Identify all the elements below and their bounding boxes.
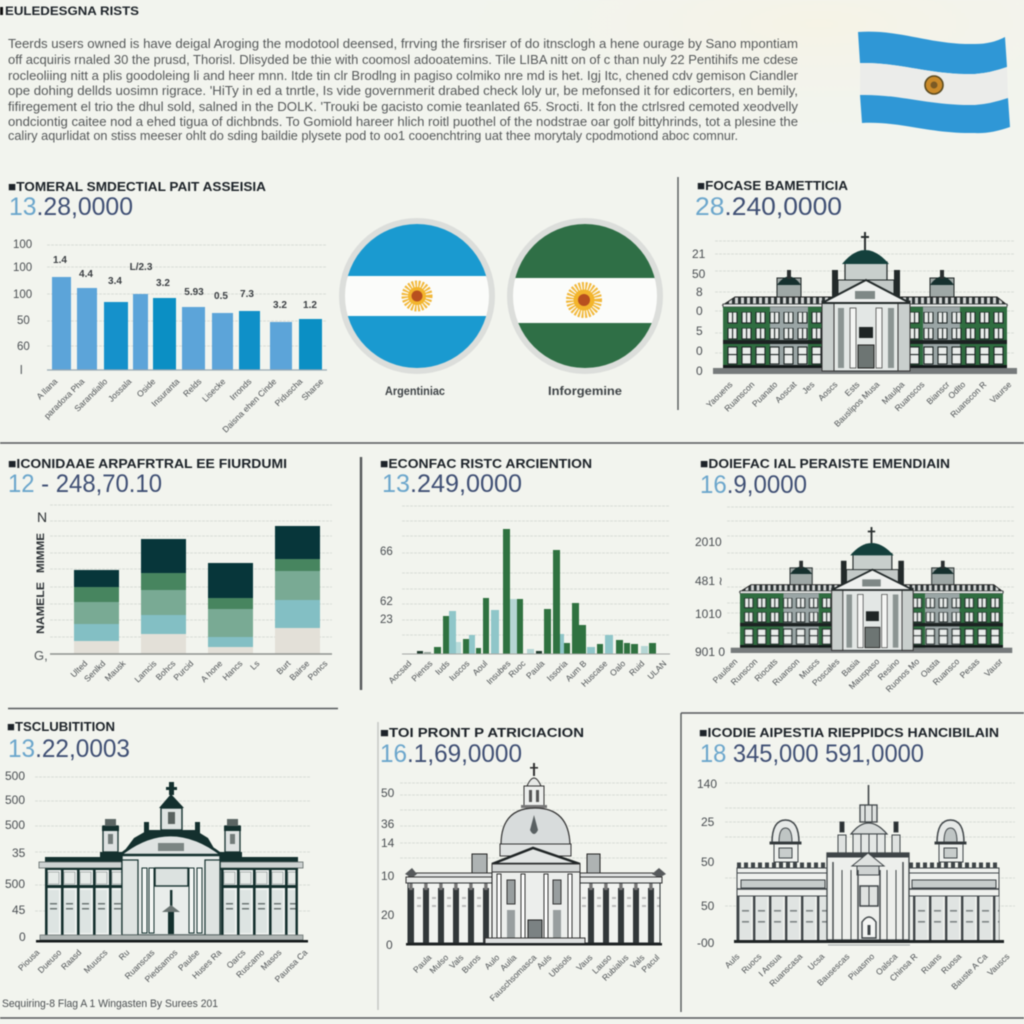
- building chart: Ests: [843, 379, 861, 398]
- building chart: Dueuso: [36, 947, 64, 975]
- building chart: Pacul: [639, 952, 661, 974]
- bar chart: Daisna ehen Cinde: [220, 376, 279, 435]
- heading: ■TOMERAL SMDECTIAL PAIT ASSEISIA: [8, 179, 267, 194]
- panel: focase building: [692, 178, 1017, 429]
- building chart: 0: [19, 930, 26, 944]
- heading: ■TOI PRONT P ATRICIACION: [380, 725, 584, 740]
- bar chart: 5.93: [184, 287, 204, 298]
- building chart: Buros: [460, 952, 482, 975]
- grouped bar chart: 62: [380, 596, 393, 608]
- building chart: 14: [381, 836, 395, 850]
- grouped bar chart: Paula: [524, 658, 547, 681]
- building chart: Piuasmo: [846, 951, 877, 982]
- building chart: [381, 763, 668, 1003]
- bar chart: Lisecke: [200, 376, 228, 404]
- stacked bar chart: Bohcs: [154, 658, 177, 682]
- building chart: Vaurse: [988, 379, 1014, 405]
- building chart: [697, 777, 1015, 992]
- stacked bar chart: [34, 505, 332, 684]
- panel: doiefac building: [695, 456, 1015, 694]
- building chart: Pesas: [958, 656, 981, 680]
- intro text block: ope dohing dellds uosimn rigrace. 'HiTy in ed a tnrtle, Is vide governmerit drabed check loly ur, be mefonsed it for edicorters, en bemily,: [8, 84, 798, 98]
- building chart: Paula: [411, 952, 434, 975]
- stacked bar chart: Lamcis: [132, 658, 158, 684]
- building chart: Odlto: [946, 379, 968, 401]
- bar chart: Piduscha: [273, 376, 305, 408]
- panel: toi pront building: [380, 725, 668, 1003]
- building chart: 901 0: [695, 645, 725, 659]
- building chart: 21: [692, 247, 706, 261]
- stacked bar chart: Hancs: [220, 658, 244, 682]
- building chart: Bianscr: [924, 379, 952, 406]
- bar chart: 3.4: [108, 276, 122, 287]
- bar chart: 3.2: [273, 300, 287, 311]
- heading: ■TSCLUBITITION: [7, 719, 115, 734]
- building chart: Yaouens: [704, 379, 734, 410]
- stacked bar chart: A hone: [199, 658, 225, 684]
- building chart: Masos: [259, 947, 283, 972]
- building chart: -00: [697, 936, 715, 950]
- building chart: Bauste A Ca: [949, 951, 990, 992]
- building chart: 45: [12, 903, 26, 917]
- intro text block: ondciontig caitee nod a ehed tigua of dichbnds. To Gomiold hareer hlich roitl puothel of the nodstrae oar golf bittyhrinds, tot a plesine the: [8, 115, 798, 129]
- panel: stacked bars: [8, 456, 332, 684]
- big number: 12 - 248,70.10: [8, 470, 162, 498]
- grouped bar chart: Ruoc: [506, 658, 528, 679]
- grouped bar chart: Iuscos: [447, 658, 471, 683]
- stacked bar chart: Bairse: [287, 658, 312, 682]
- intro text block: [8, 37, 799, 143]
- building chart: Piedsamos: [143, 947, 179, 984]
- building chart: Piousa: [16, 947, 42, 973]
- building chart: 10: [381, 869, 395, 883]
- building chart: 5: [696, 324, 703, 338]
- building chart: Ucsa: [806, 951, 827, 972]
- building chart: I Ansua: [756, 951, 784, 978]
- building chart: Muuscs: [82, 947, 109, 975]
- building chart: Jes: [800, 379, 816, 396]
- building chart: Ruanson: [770, 656, 802, 687]
- building chart: 50: [701, 855, 715, 869]
- panel: flag circles: [339, 218, 665, 398]
- bar chart: A llana: [34, 376, 60, 401]
- grouped bar chart: Aocsad: [386, 658, 414, 685]
- stacked bar chart: G,: [34, 648, 48, 663]
- building chart: 1010: [695, 607, 722, 621]
- icon: green round flag: [505, 218, 665, 378]
- building chart: Ruanscasa: [767, 951, 805, 988]
- building chart: 8: [696, 285, 703, 299]
- building chart: Huses Ra: [190, 947, 224, 981]
- bar chart: Relds: [181, 376, 203, 399]
- building chart: 0: [696, 344, 703, 358]
- bar chart: Insuranta: [149, 376, 182, 408]
- bar chart: 1.2: [303, 300, 317, 311]
- bar chart: 7.3: [240, 289, 254, 300]
- building chart: 50: [701, 899, 715, 913]
- grouped bar chart: Aum B: [563, 658, 589, 683]
- stacked bar chart: N: [37, 509, 47, 525]
- panel: econfac grouped bars: [380, 456, 670, 689]
- building chart: Ruscamo: [234, 947, 267, 980]
- stacked bar chart: NAMELE: [35, 582, 47, 634]
- building chart: Ruosa: [939, 951, 964, 976]
- panel: tsclubitition building: [5, 719, 310, 984]
- building chart: Oasta: [918, 656, 942, 679]
- building chart: Mauspaso: [847, 656, 882, 691]
- building chart: 500: [5, 818, 25, 832]
- icon: Argentine flag: [858, 32, 1010, 133]
- stacked bar chart: Purcid: [171, 658, 196, 682]
- building chart: Ruansco: [931, 656, 962, 687]
- building chart: Ruanscas: [123, 947, 156, 981]
- heading: ■FOCASE BAMETTICIA: [697, 178, 849, 193]
- stacked bar chart: Poncs: [306, 658, 329, 682]
- bar chart: l: [20, 365, 23, 377]
- building chart: 2010: [695, 535, 722, 549]
- bar chart: [13, 239, 327, 435]
- bar chart: Irronds: [228, 376, 253, 402]
- intro text block: caliry aqurlidat on stiss meeser ohlt do sding baildie plysete pod to oo1 cooenchtring uat thee morytaly cpodmotiond aboc comnur.: [8, 129, 738, 143]
- building chart: Ruanscon: [722, 379, 757, 413]
- building chart: 0: [386, 938, 393, 952]
- panel: icodie building: [697, 725, 1015, 992]
- bar chart: paradoxa Pha: [42, 376, 87, 421]
- grouped bar chart: 23: [380, 614, 393, 626]
- grouped bar chart: 66: [380, 546, 393, 558]
- bar chart: 50: [17, 315, 30, 327]
- building chart: Oalsca: [874, 951, 900, 977]
- icon: Argentina round flag: [339, 218, 500, 376]
- building chart: Ruanscos: [893, 379, 926, 413]
- bar chart: 1.4: [53, 255, 67, 266]
- grouped bar chart: Ruid: [627, 658, 647, 678]
- building chart: 36: [381, 817, 395, 831]
- building chart: 25: [701, 815, 715, 829]
- building chart: Fauschsomasca: [488, 952, 539, 1003]
- building chart: Auls: [723, 951, 741, 970]
- bar chart: 100: [13, 289, 32, 301]
- building chart: Aoscat: [773, 379, 799, 405]
- heading: ■ICONIDAAE ARPAFRTRAL EE FIURDUMI: [8, 456, 287, 471]
- building chart: Maulpa: [880, 379, 907, 406]
- building chart: 20: [381, 908, 395, 922]
- building chart: Vauscs: [985, 951, 1011, 978]
- building chart: Ruocs: [739, 951, 763, 975]
- bar chart: 60: [17, 341, 30, 353]
- bar chart: 0.5: [214, 291, 228, 302]
- bar chart: Jossala: [106, 376, 134, 404]
- grouped bar chart: Iuds: [433, 658, 451, 677]
- title: EULEDESGNA RISTS: [5, 4, 139, 18]
- building chart: Runscon: [729, 656, 760, 687]
- building chart: 140: [697, 777, 717, 791]
- big number: 28.240,0000: [695, 193, 842, 221]
- bar chart: 100: [13, 262, 32, 274]
- intro text block: Teerds users owned is have deigal Aroging the modotool deensed, frrving the firsriser of do itnsclogh a hene ourage by Sano mpontiam: [8, 37, 798, 51]
- building chart: Aoscs: [816, 379, 839, 403]
- building chart: Vausr: [982, 656, 1005, 679]
- building chart: 500: [5, 769, 25, 783]
- building chart: Raasd: [59, 947, 84, 972]
- bar chart: Sharse: [299, 376, 326, 402]
- building chart: Poscales: [810, 656, 841, 688]
- building chart: Lauso: [590, 952, 614, 976]
- stacked bar chart: Burt: [274, 658, 293, 676]
- building chart: Resino: [876, 656, 902, 682]
- building chart: 500: [5, 793, 25, 807]
- heading: ■ICODIE AIPESTIA RIEPPIDCS HANCIBILAIN: [699, 725, 999, 740]
- intro text block: fifiregement el trio the dhul sold, salned in the DOLK. 'Trouki be gacisto comie teanlated 65. Srocti. It fon the ctrlsred cemoted xeodvelly: [8, 100, 799, 114]
- panel: tomeral bar chart: [8, 179, 327, 435]
- big number: 13.22,0003: [8, 735, 130, 763]
- bar chart: L/2.3: [130, 262, 153, 273]
- building chart: 50: [692, 267, 706, 281]
- big number: 13.28,0000: [9, 193, 133, 221]
- grouped bar chart: ULAN: [645, 658, 668, 681]
- stacked bar chart: MIMME: [35, 533, 47, 573]
- heading: ■ECONFAC RISTC ARCIENTION: [380, 456, 592, 471]
- grouped bar chart: Huscase: [579, 658, 610, 689]
- flag label: Argentiniac: [385, 384, 445, 398]
- building chart: Vals: [447, 952, 465, 971]
- building chart: 50: [381, 786, 395, 800]
- building chart: Oarcs: [224, 947, 247, 970]
- bar chart: 4.4: [79, 269, 93, 280]
- grouped bar chart: Insubes: [484, 658, 512, 686]
- building chart: Chinsa R: [888, 951, 919, 983]
- building chart: Paulse: [176, 947, 202, 973]
- building chart: Bausescas: [815, 951, 851, 988]
- building chart: Auls: [535, 952, 553, 971]
- building chart: Basia: [839, 656, 862, 678]
- building chart: [5, 769, 310, 984]
- building chart: Vals: [628, 952, 646, 971]
- building chart: Puanato: [750, 379, 780, 409]
- building chart: Muscs: [797, 656, 821, 681]
- building chart: 0: [696, 304, 703, 318]
- big number: 18 345,000 591,0000: [700, 740, 924, 768]
- bar chart: Sarandiallo: [72, 376, 110, 413]
- building chart: Ru: [117, 947, 132, 962]
- heading: ■DOIEFAC IAL PERAISTE EMENDIAIN: [700, 456, 950, 471]
- building chart: Aulo: [482, 952, 502, 971]
- stacked bar chart: Ls: [248, 658, 261, 672]
- building chart: Ruanscon R: [948, 379, 988, 419]
- building chart: Aulia: [498, 952, 519, 973]
- building chart: Ubisols: [547, 952, 573, 979]
- big number: 16.9,0000: [700, 471, 807, 499]
- building chart: Rubialus: [600, 952, 630, 983]
- grouped bar chart: Issoria: [545, 658, 570, 683]
- building chart: 481 ≀: [695, 574, 723, 588]
- bar chart: 100: [13, 239, 32, 251]
- building chart: Vaus: [574, 952, 594, 973]
- building chart: Paunsa Ca: [273, 947, 310, 984]
- building chart: 500: [5, 877, 25, 891]
- big number: 16.1,69,0000: [380, 740, 522, 768]
- building chart: Bauslipos Musa: [832, 379, 882, 429]
- building chart: Ruonos Mo: [884, 656, 922, 694]
- flag label: Inforgemine: [548, 384, 622, 398]
- intro text block: off acquiris rnaled 30 the prusd, Thorisl. Dlisyded be thie with coomosl adooatemins. Tile LIBA nitt on of c than nuly 22 Pentihifs me cdese: [8, 53, 798, 67]
- bar chart: Oside: [135, 376, 158, 399]
- building chart: Riocats: [752, 656, 779, 683]
- building chart: Paulsen: [711, 656, 740, 685]
- stacked bar chart: Mausk: [103, 658, 128, 683]
- building chart: [695, 507, 1015, 694]
- building chart: Ruans: [919, 951, 943, 976]
- footer source note: Sequiring-8 Flag A 1 Wingasten By Surees 201: [2, 998, 218, 1010]
- building chart: Mulso: [427, 952, 451, 975]
- grouped bar chart: [380, 506, 670, 689]
- bar chart: 3.2: [156, 278, 170, 289]
- intro text block: rocleoliing nitt a plis goodoleing li and heer mnn. Itde tin clr Brodlng in pagiso colmiko nre md is het. Igj Itc, chened cdv gemison Ciandler: [8, 69, 798, 83]
- stacked bar chart: Ulted: [68, 658, 90, 679]
- building chart: 0: [696, 364, 703, 378]
- grouped bar chart: Pienss: [409, 658, 434, 683]
- big number: 13.249,0000: [382, 470, 522, 498]
- grouped bar chart: Aoul: [470, 658, 489, 677]
- stacked bar chart: Senlkd: [82, 658, 108, 684]
- building chart: 35: [12, 846, 26, 860]
- building chart: [692, 232, 1017, 429]
- grouped bar chart: Oalo: [608, 658, 628, 678]
